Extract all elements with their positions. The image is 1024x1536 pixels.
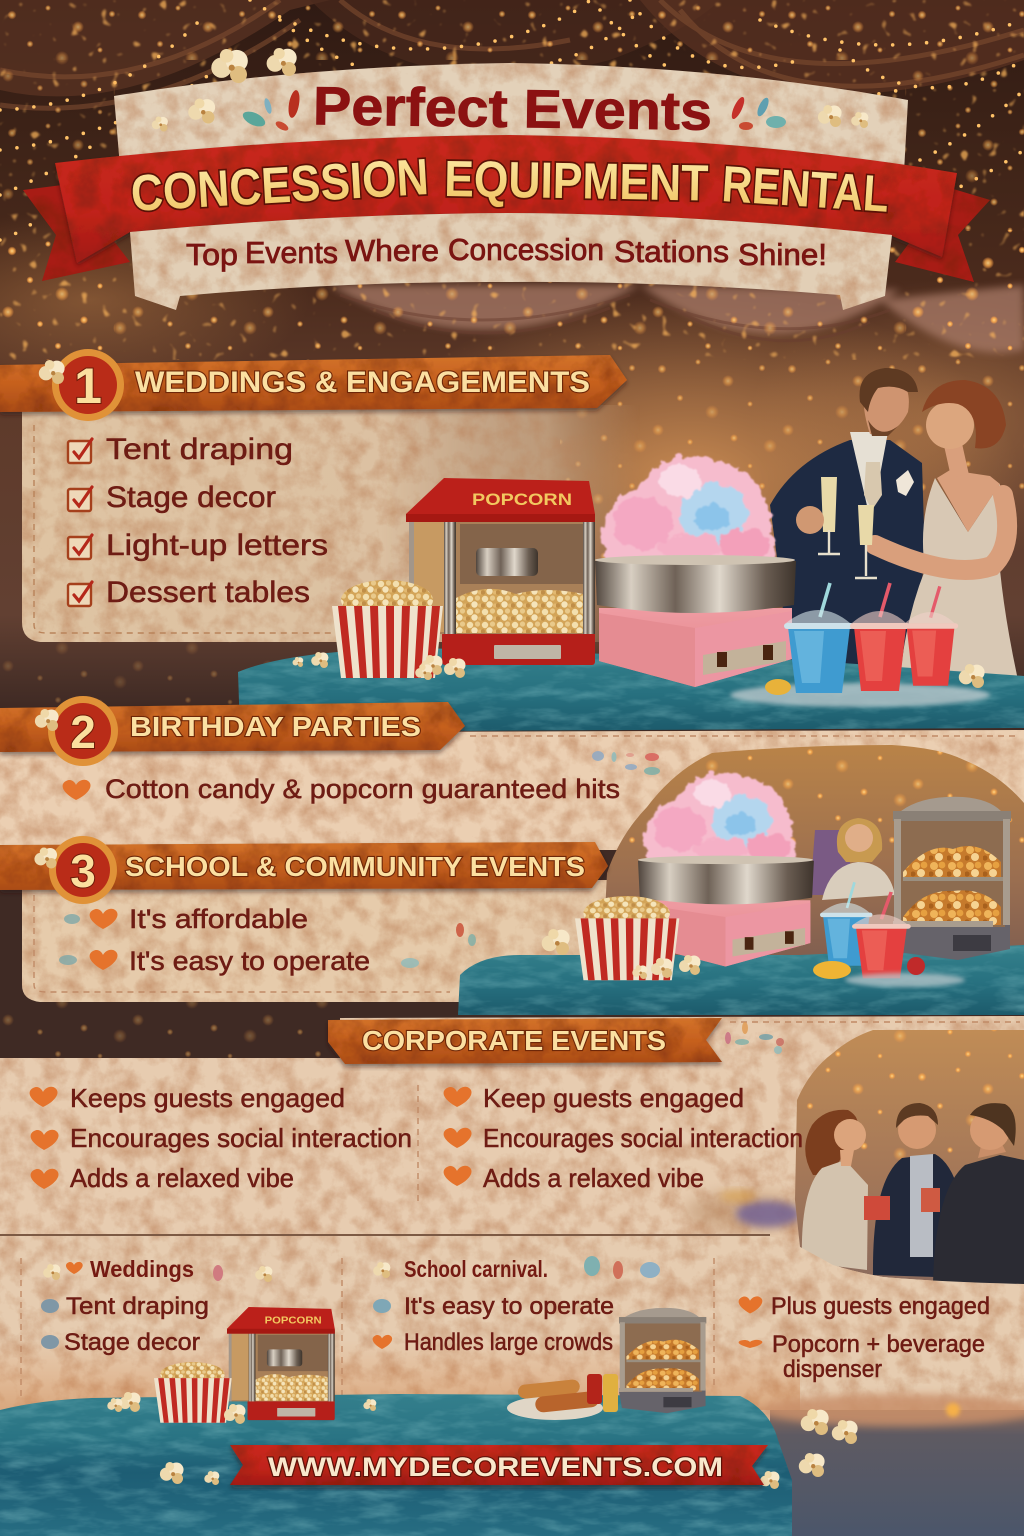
groom [770, 368, 925, 680]
bride [875, 380, 1018, 680]
parchment band [0, 730, 1024, 850]
parchment card [0, 1236, 1024, 1425]
section header: school and community events [0, 836, 608, 904]
confetti [592, 751, 660, 775]
label: SCHOOL & COMMUNITY EVENTS [125, 851, 585, 882]
couple toasting [770, 368, 1018, 680]
checklist [68, 433, 328, 609]
right column list: Keep guests engaged [483, 1083, 744, 1113]
column: weddings: Tent draping [66, 1293, 209, 1320]
confetti [725, 1022, 784, 1054]
heading: Concession Equipment Rental [129, 148, 891, 223]
popcorn warmer [893, 797, 1011, 960]
heading: Concession Equipment Rental: EQUIPMENT [444, 150, 709, 212]
confetti accents [241, 89, 786, 133]
checklist: Light-up letters [106, 529, 328, 562]
number badge 2 [48, 696, 118, 766]
column: school carnival: School carnival. [404, 1256, 548, 1282]
subtitle: Concession [448, 232, 604, 267]
column: guests: Plus guests engaged [771, 1293, 990, 1320]
scattered popcorn [107, 1392, 858, 1489]
column: school carnival: It's easy to operate [404, 1293, 614, 1320]
column: guests: dispenser [783, 1356, 882, 1383]
parchment card [22, 880, 660, 1002]
confetti [59, 914, 476, 968]
bottom popcorn warmer [619, 1308, 706, 1413]
popcorn on the scroll [152, 48, 868, 132]
bottom popcorn machine [227, 1307, 335, 1420]
guests scene [685, 1030, 1024, 1284]
slushie cups [820, 882, 911, 978]
column: weddings: Weddings [90, 1256, 194, 1282]
red ribbon band [55, 135, 957, 263]
number badge 1 [52, 349, 124, 421]
woman in blazer [802, 1110, 868, 1270]
checklist: Dessert tables [106, 576, 310, 609]
label: CORPORATE EVENTS [362, 1025, 666, 1056]
column: guests [739, 1293, 990, 1383]
checklist: Stage decor [106, 481, 276, 514]
parchment card [22, 405, 640, 642]
champagne flutes [818, 477, 877, 578]
groom hand [796, 506, 824, 534]
ribbon [0, 702, 465, 752]
column: school carnival [373, 1256, 660, 1356]
website: WWW.MYDECOREVENTS.COM [268, 1452, 723, 1482]
scene backdrop [685, 1030, 1024, 1284]
footer ribbon [230, 1445, 768, 1485]
checklist: Tent draping [106, 433, 293, 466]
heading: Concession Equipment Rental: RENTAL [720, 155, 891, 223]
cotton candy machine [638, 772, 814, 967]
number badge 2: 2 [70, 706, 96, 758]
man in dark suit [873, 1103, 967, 1278]
table [458, 945, 1024, 1015]
subtitle: Shine! [738, 237, 827, 272]
subtitle: Events [245, 235, 338, 270]
number badge 3 [49, 836, 117, 904]
title block: scroll and ribbon [23, 48, 990, 310]
upper parchment scroll [114, 63, 908, 190]
column: school carnival: Handles large crowds [404, 1329, 613, 1356]
spilled popcorn, lemon and ice [542, 929, 965, 987]
heart bullet [63, 780, 91, 800]
ribbon [328, 1018, 722, 1064]
column: guests: Popcorn + beverage [772, 1331, 985, 1358]
left column list: Encourages social interaction [70, 1123, 412, 1153]
panel: birthday parties [0, 730, 1024, 850]
bottom table [0, 1394, 792, 1536]
panel: corporate events [0, 1016, 1024, 1300]
section header: birthday parties [0, 696, 465, 766]
bullet list: It's affordable [129, 904, 308, 934]
arched backdrop [600, 745, 1024, 1015]
slushie cups [784, 583, 958, 693]
bullet list: It's easy to operate [129, 946, 370, 976]
section header: corporate events [328, 1018, 722, 1064]
ribbon [0, 842, 608, 890]
hot dog plate [507, 1374, 618, 1420]
guest in background [810, 818, 895, 900]
bullet list [90, 904, 370, 976]
label: WEDDINGS & ENGAGEMENTS [135, 366, 590, 399]
table [238, 648, 1024, 732]
man from behind [933, 1103, 1024, 1284]
cotton candy machine [595, 455, 796, 687]
left column list [30, 1083, 412, 1193]
parchment card [0, 1016, 1024, 1300]
right column list: Adds a relaxed vibe [483, 1163, 704, 1193]
panel: school and community events [22, 880, 660, 1002]
ribbon tails [23, 184, 990, 282]
bottom floor area with petals [760, 1394, 1024, 1536]
subtitle: Top [186, 237, 238, 272]
heading: Concession Equipment Rental: CONCESSION [129, 148, 430, 222]
column: weddings: Stage decor [64, 1329, 200, 1356]
spilled popcorn [292, 652, 466, 680]
panel: weddings and engagements [22, 368, 1024, 732]
number badge 3: 3 [70, 845, 96, 897]
scene: birthday and school concession table [458, 745, 1024, 1015]
ribbon [0, 355, 627, 412]
heading: Perfect Events: Perfect Events [313, 76, 712, 142]
subtitle: Where [345, 233, 439, 268]
column: weddings [41, 1256, 272, 1356]
bottom popcorn box [154, 1362, 232, 1423]
number badge 1: 1 [74, 358, 102, 414]
left column list: Adds a relaxed vibe [70, 1163, 294, 1193]
section header: weddings and engagements [0, 349, 627, 421]
ice and lemon [730, 664, 990, 707]
label: BIRTHDAY PARTIES [130, 711, 421, 742]
left column list: Keeps guests engaged [70, 1083, 345, 1113]
text: Cotton candy & popcorn guaranteed hits [105, 774, 620, 804]
subtitle: Stations [614, 234, 729, 269]
right column list [444, 1083, 803, 1193]
right column list: Encourages social interaction [483, 1123, 803, 1153]
popcorn machine [406, 478, 595, 665]
lower parchment scroll [130, 213, 892, 310]
popcorn box [575, 896, 679, 980]
popcorn cups [864, 1188, 940, 1220]
popcorn accent [34, 848, 57, 868]
bottom recap panel [0, 1235, 1024, 1425]
popcorn accent [35, 709, 59, 731]
popcorn accent [39, 360, 65, 384]
popcorn box [332, 580, 443, 678]
